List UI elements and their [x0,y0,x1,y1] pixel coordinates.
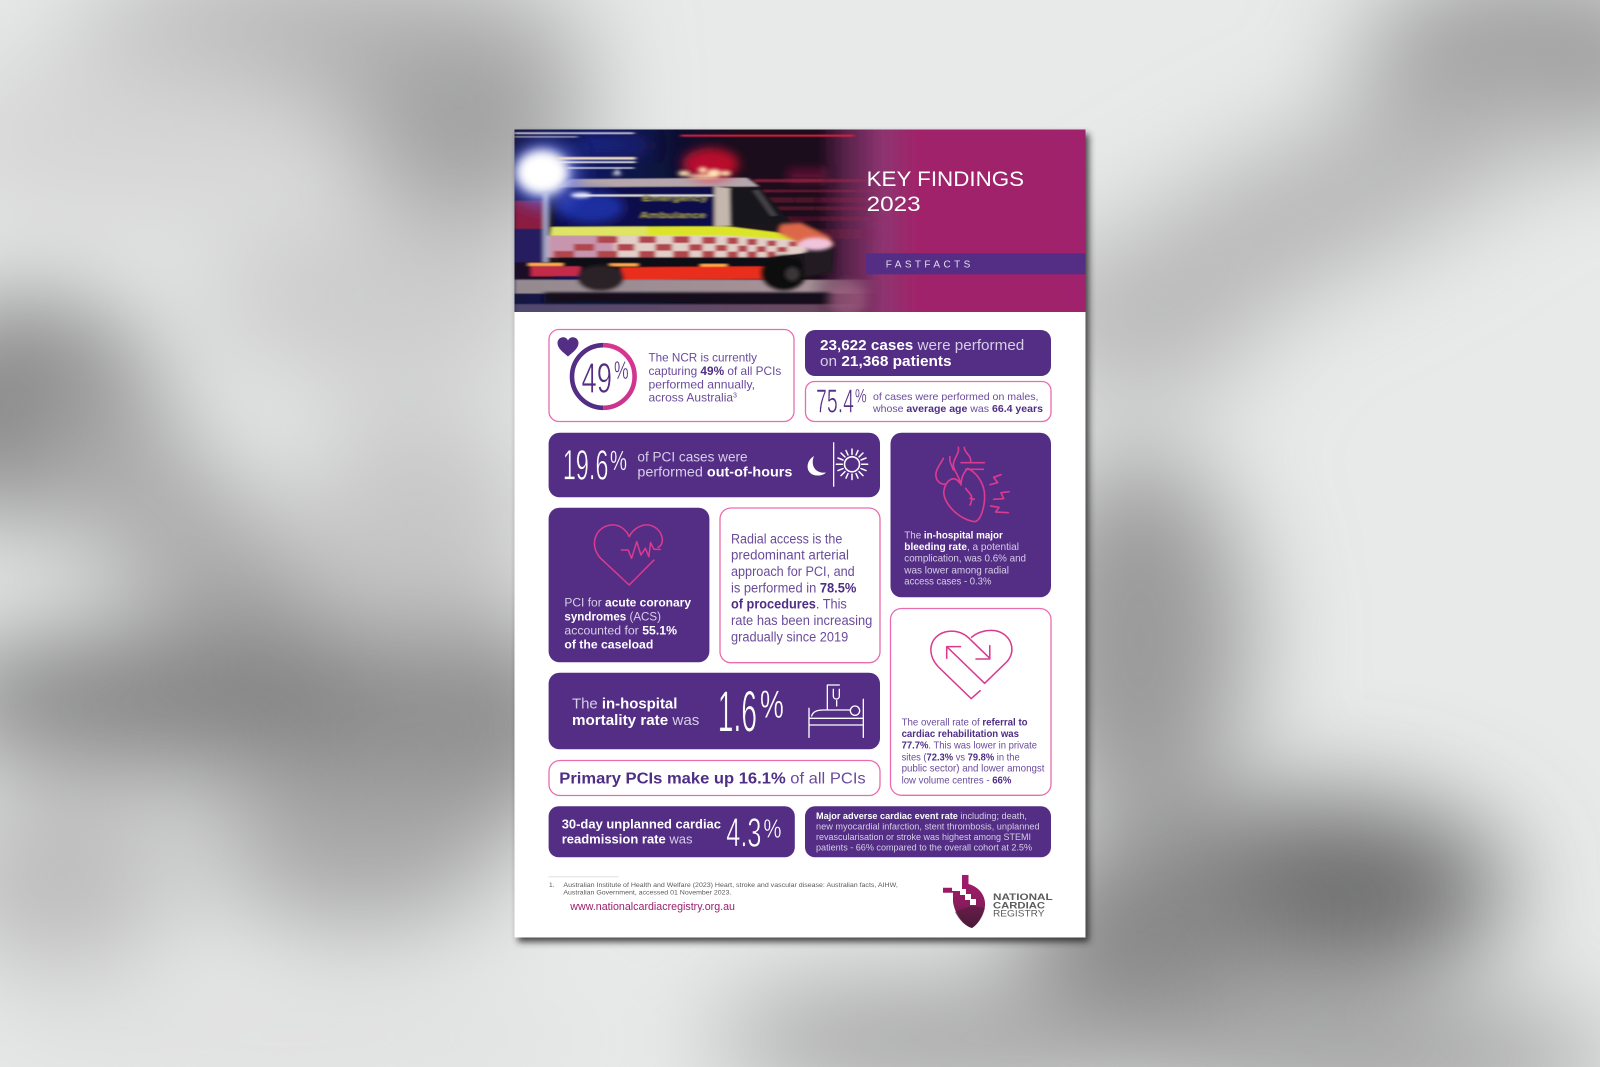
panel: major adverse cardiac events: patients - 66% compared to the overall cohort at 2.5% [816,843,1033,854]
header banner with ambulance photo [507,130,1086,316]
panel: cases and patients: 23,622 cases were performed [820,338,1024,354]
fast facts ribbon: FASTFACTS [886,259,971,270]
panel: primary PCIs: Primary PCIs make up 16.1% of all PCIs [559,770,866,787]
panel: cases on males [806,382,1051,422]
panel: radial access: Radial access is the [731,531,842,546]
road [514,280,887,316]
left background [514,139,827,279]
capture description: capturing 49% of all PCIs [648,364,781,378]
lower sill [559,257,777,267]
stat 19.6 percent: 19.6 [563,441,608,489]
capture description: 3 [733,393,737,400]
panel: major adverse cardiac events: revascularisation or stroke was highest among STEMI [816,832,1031,843]
icon: sun [836,449,868,480]
van roof [557,178,759,188]
lettering [640,193,708,220]
stat 4.3 percent: 4.3 [726,810,761,856]
website url: www.nationalcardiacregistry.org.au [569,901,735,913]
checker stripe [547,236,809,257]
panel: radial access: rate has been increasing [731,613,872,628]
logo wordmark [993,892,1053,920]
stat 49 percent: 49 [582,355,612,403]
panel: cases on males: whose average age was 66.4 years [872,404,1043,415]
icon: heart [558,337,578,356]
panel: in-hospital mortality: The in-hospital [572,696,677,712]
stat 75.4 percent: % [855,387,867,408]
bleeding description: access cases - 0.3% [904,577,991,588]
bleeding description: The in-hospital major [904,530,1003,541]
red skirt [621,266,769,280]
icon: heart with pulse [594,525,662,585]
ACS description: syndromes (ACS) [564,610,661,624]
capture description: performed annually, [648,377,755,391]
logo wordmark: CARDIAC [993,900,1045,911]
logo mark [943,875,985,928]
stat 4.3 percent: % [764,814,781,844]
fast facts ribbon [866,253,1086,274]
bleeding description: complication, was 0.6% and [904,554,1026,565]
van body [547,182,834,273]
lettering: Emergency [642,193,708,203]
panel: bleeding rate [890,433,1051,597]
panel: radial access: gradually since 2019 [731,629,848,644]
panel: in-hospital mortality [549,673,880,749]
poster contents [507,130,1086,928]
icon: heart with arrows [931,630,1012,699]
footnote: Australian Institute of Health and Welfare (2023) Heart, stroke and vascular disease: Australian facts, AIHW, [563,882,898,889]
yellow stripe [550,226,801,241]
panel: radial access: of procedures. This [731,597,847,612]
capture description: The NCR is currently [648,350,757,364]
rehabilitation description [902,718,1045,786]
panel: 49 percent capture [549,330,794,422]
beacon glow [682,148,739,180]
panel: primary PCIs [549,760,880,796]
hood [777,222,834,246]
ACS description: of the caseload [564,637,653,651]
logo: National Cardiac Registry [943,875,1053,928]
side window [553,186,714,226]
divider [833,442,834,487]
panel: major adverse cardiac events: Major adverse cardiac event rate including; death, [816,811,1027,822]
panel: out of hours [549,433,880,497]
lettering: Ambulance [640,210,706,220]
footnote: Australian Government, accessed 01 November 2023. [563,889,732,896]
stat 75.4 percent: 75.4 [816,382,854,419]
bleeding description [903,530,1026,588]
title: KEY FINDINGS [867,167,1024,191]
panel: radial access: approach for PCI, and [731,564,855,579]
footnote: 1. [549,882,555,889]
panel: out of hours: of PCI cases were [637,449,748,464]
ACS description [564,596,691,651]
cab window [731,188,791,224]
ambulance motion image [507,132,887,316]
icon: anatomical heart [936,447,1009,522]
panel: 30-day readmission: readmission rate was [562,831,693,846]
rehabilitation description: public sector) and lower amongst [902,764,1045,775]
title [867,167,1024,216]
side lights [528,263,727,267]
panel: radial access: is performed in 78.5% [731,580,856,595]
icon: progress ring [572,345,635,408]
stat 1.6 percent: 1.6 [718,680,757,745]
rehabilitation description: cardiac rehabilitation was [902,729,1019,740]
flare [507,141,581,207]
logo wordmark: NATIONAL [993,892,1053,903]
icon: moon [808,456,826,476]
page shadow [518,134,1089,942]
panel: cases and patients [805,330,1051,376]
panel: cases and patients: on 21,368 patients [820,354,952,370]
panel: radial access [720,508,880,663]
rehabilitation description: sites (72.3% vs 79.8% in the [902,752,1020,763]
B pillar [714,186,731,226]
stat 19.6 percent: % [610,445,627,476]
panel: major adverse cardiac events: new myocardial infarction, stent thrombosis, unplanned [816,822,1040,833]
capture description [648,350,781,405]
panel: cardiac rehabilitation [890,608,1051,795]
panel: radial access: predominant arterial [731,548,849,563]
logo wordmark: REGISTRY [993,909,1045,920]
panel: major adverse cardiac events [805,806,1051,857]
bleeding description: was lower among radial [903,565,1009,576]
rehabilitation description: The overall rate of referral to [902,718,1028,729]
icon: hospital bed [809,685,863,737]
rehabilitation description: low volume centres - 66% [902,775,1011,786]
panel: 30-day readmission [549,806,795,857]
title: 2023 [867,192,921,216]
panel: out of hours: performed out-of-hours [637,465,792,480]
capture description: across Australia [648,391,732,405]
light streaks [514,132,636,169]
ACS description: accounted for 55.1% [564,623,677,637]
ACS description: PCI for acute coronary [564,596,691,610]
rehabilitation description: 77.7%. This was lower in private [902,741,1037,752]
panel: in-hospital mortality: mortality rate was [572,713,699,729]
bleeding description: bleeding rate, a potential [904,542,1019,553]
stat 1.6 percent: % [760,684,784,727]
panel: 30-day readmission: 30-day unplanned cardiac [562,817,721,832]
footnote [549,876,898,896]
front bumper [804,246,834,277]
stat 49 percent: % [614,357,629,385]
wheels [578,265,623,291]
panel: cases on males: of cases were performed on males, [873,392,1038,403]
panel: acute coronary syndromes [549,508,709,662]
poster page [514,130,1086,938]
speed streaks [754,179,887,239]
